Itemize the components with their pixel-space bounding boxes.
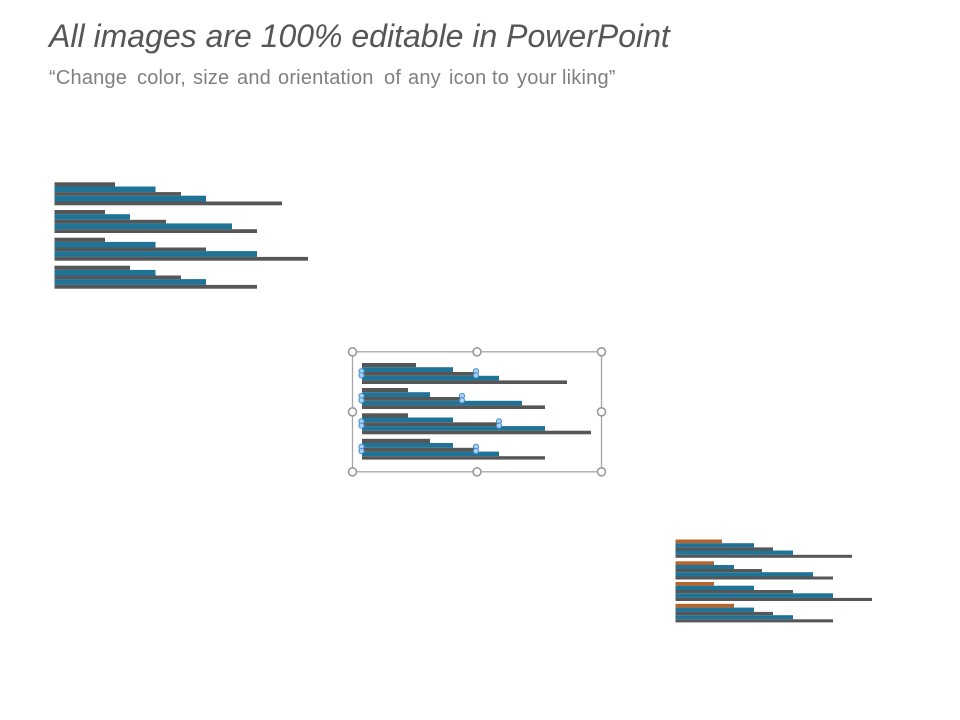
subtitle: any xyxy=(408,67,441,89)
bar group 3 xyxy=(362,413,591,434)
subtitle: orientation xyxy=(278,67,374,89)
bar group 3 xyxy=(54,238,308,261)
subtitle: of xyxy=(384,67,401,89)
bar group 1 xyxy=(54,182,282,205)
chart: centre bar chart with selection xyxy=(348,348,606,476)
bar group 3 xyxy=(676,582,872,601)
subtitle: liking” xyxy=(562,67,616,89)
subtitle: your xyxy=(517,67,557,89)
subtitle: color, xyxy=(137,67,186,89)
data point handles xyxy=(359,369,502,454)
bar group 4 xyxy=(676,604,833,622)
chart: left bar chart xyxy=(54,182,308,289)
bar group 1 xyxy=(676,540,852,558)
selection handles xyxy=(348,348,606,476)
bar group 2 xyxy=(676,561,833,580)
subtitle: “Change xyxy=(49,67,127,89)
bar group 4 xyxy=(54,266,257,289)
subtitle: icon xyxy=(449,67,486,89)
bar group 1 xyxy=(362,363,567,384)
selection frame xyxy=(352,352,602,472)
subtitle: to xyxy=(492,67,509,89)
bar group 4 xyxy=(362,439,545,460)
subtitle: size xyxy=(193,67,229,89)
title: All images are 100% editable in PowerPoint xyxy=(47,18,671,54)
bar group 2 xyxy=(54,210,257,233)
subtitle: and xyxy=(237,67,271,89)
chart: right bar chart with orange bars xyxy=(676,540,872,622)
bar group 2 xyxy=(362,388,545,409)
